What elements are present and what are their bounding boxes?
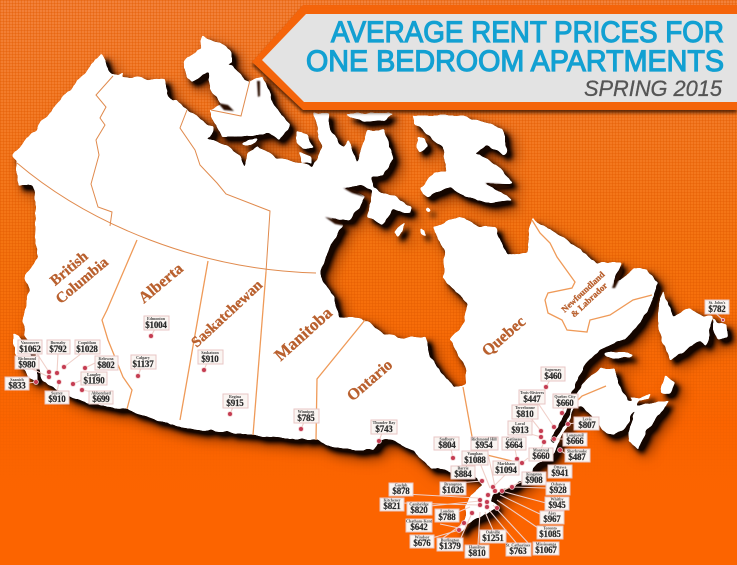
Saanich: Saanich [10, 377, 25, 382]
Montreal: $660 [532, 451, 550, 461]
Mississauga [533, 542, 559, 555]
Chatham-Kent: Chatham-Kent [406, 518, 433, 524]
Langley [81, 372, 107, 386]
Laval: Laval [515, 421, 526, 426]
Edmonton: Edmonton [147, 316, 166, 321]
Terrebonne: $810 [516, 409, 534, 419]
Longueuil: $666 [566, 436, 584, 446]
Montreal: Montreal [533, 448, 550, 452]
Richmond Hill: Richmond Hill [471, 436, 497, 442]
Langley: $1190 [83, 376, 105, 386]
Guelph: $878 [392, 486, 410, 496]
Kitchener: Kitchener [383, 498, 401, 502]
Saguenay [541, 367, 565, 381]
NWT / Nunavut [180, 110, 270, 272]
Nova Scotia [628, 400, 670, 450]
Richmond: $980 [18, 360, 36, 370]
Oakville: $1251 [482, 533, 504, 543]
Abbotsford: Abbotsford [91, 390, 112, 396]
Avalon peninsula [713, 317, 728, 338]
Barrie [451, 466, 475, 479]
Longueuil: Longueuil [566, 432, 585, 438]
Guelph: Guelph [395, 482, 408, 488]
60th parallel [17, 163, 316, 273]
St. Catharines: $763 [509, 546, 527, 556]
Vaughan: $1088 [464, 455, 486, 465]
St. Catharines: St. Catharines [506, 542, 531, 548]
location pins [34, 318, 725, 532]
Markham: $1094 [495, 465, 517, 475]
Southampton Island [368, 187, 412, 225]
Vancouver [18, 340, 42, 354]
Saskatoon: $910 [201, 354, 219, 364]
Brampton: Brampton [444, 482, 463, 486]
Surrey: Surrey [51, 390, 63, 396]
Windsor: Windsor [415, 534, 430, 540]
Ontario / Quebec [463, 387, 520, 463]
Regina: $915 [226, 398, 244, 408]
Langley: Langley [87, 372, 101, 377]
Ajax [540, 510, 564, 524]
Montreal [529, 448, 553, 461]
Winnipeg: $785 [297, 413, 315, 423]
Laval: $913 [511, 425, 529, 435]
Saanich: $833 [8, 380, 26, 390]
Quebec / Labrador [532, 220, 652, 332]
Saskatoon [198, 350, 223, 364]
Cambridge [407, 502, 432, 515]
Saguenay: Saguenay [545, 367, 561, 372]
Edmonton [144, 316, 169, 330]
price labels [5, 300, 729, 558]
Kingston: $908 [525, 475, 543, 485]
Manitoba / Ontario [316, 320, 365, 440]
Brampton: $1026 [442, 485, 464, 495]
St. John's [705, 300, 729, 314]
Windsor [410, 534, 434, 548]
banner shape [252, 5, 737, 110]
title banner [252, 5, 737, 110]
Quebec / New Brunswick [570, 386, 606, 408]
title line 2: ONE BEDROOM APARTMENTS [306, 45, 724, 78]
Saskatchewan: Saskatchewan [189, 277, 266, 351]
dark slits in the islands [218, 81, 624, 288]
Barrie: $884 [454, 469, 472, 479]
Whitby: Whitby [551, 496, 563, 502]
Burnaby: Burnaby [50, 340, 66, 345]
Hudson Bay islands [393, 222, 405, 236]
London [435, 508, 459, 522]
Chatham-Kent: $642 [410, 522, 428, 532]
Abbotsford: $699 [92, 394, 110, 404]
Trois-Rivieres: Trois-Rivieres [520, 390, 544, 395]
Prince Edward Island [628, 392, 650, 403]
British Columbia: British [47, 248, 92, 289]
background [0, 0, 737, 430]
Ottawa: Ottawa [554, 464, 566, 470]
Vaughan: Vaughan [467, 451, 483, 456]
Surrey [45, 390, 69, 404]
Cambridge: $820 [410, 505, 428, 515]
British Columbia: Columbia [53, 254, 112, 307]
Oshawa: Oshawa [551, 482, 565, 486]
Oshawa: $928 [549, 485, 567, 495]
Calgary: $1137 [132, 359, 154, 369]
Toronto: Toronto [543, 526, 557, 530]
Thunder Bay: $743 [375, 424, 393, 434]
Trois-Rivieres: $447 [523, 394, 541, 404]
Banks Island [183, 37, 232, 82]
Ottawa [548, 464, 572, 478]
Barrie: Barrie [457, 466, 469, 470]
province name labels [47, 248, 609, 405]
Richmond [15, 356, 39, 370]
Gatineau: $664 [505, 440, 523, 450]
Saanich [5, 377, 29, 390]
Toronto: $1085 [539, 529, 561, 539]
Ontario: Ontario [344, 356, 396, 405]
Abbotsford [89, 390, 113, 404]
Quebec City [553, 394, 578, 408]
Cambridge: Cambridge [409, 502, 429, 506]
Terrebonne [512, 405, 538, 419]
Coquitlam: Coquitlam [78, 340, 97, 345]
Surrey: $910 [48, 394, 66, 404]
Guelph [389, 482, 413, 496]
Cape Breton [660, 375, 675, 395]
Toronto [537, 526, 563, 539]
Calgary: Calgary [136, 355, 150, 360]
St. Catharines [506, 542, 531, 556]
Vaughan [462, 451, 488, 465]
Coquitlam [75, 340, 100, 354]
Saskatchewan / Manitoba [253, 272, 266, 435]
Levis: $807 [578, 420, 596, 430]
Saguenay: $460 [544, 371, 562, 381]
Ajax: Ajax [548, 510, 556, 516]
Baffin Island [413, 115, 513, 203]
Mississauga: $1067 [535, 545, 557, 555]
Levis: Levis [582, 416, 592, 422]
Oshawa [546, 482, 570, 495]
London: $788 [438, 512, 456, 522]
Vancouver: Vancouver [21, 340, 39, 345]
mainland [12, 54, 658, 532]
Edmonton: $1004 [145, 320, 167, 330]
Windsor: $676 [413, 538, 431, 548]
leader lines [28, 310, 723, 545]
London: London [440, 508, 454, 514]
Longueuil [563, 432, 587, 446]
Sherbrooke [565, 448, 590, 462]
Ajax: $967 [543, 514, 561, 524]
Yukon / NWT [91, 76, 113, 226]
BC / Alberta [102, 240, 137, 409]
Regina: Regina [229, 394, 241, 399]
Laval [508, 421, 532, 435]
Kelowna: Kelowna [98, 356, 114, 361]
Regina [223, 394, 248, 408]
Sudbury: Sudbury [440, 436, 454, 442]
provincial borders [17, 76, 316, 273]
Burlington [437, 538, 463, 551]
Thunder Bay [371, 420, 397, 434]
Calgary [131, 355, 156, 369]
Vancouver: $1062 [19, 344, 41, 354]
Chatham-Kent [406, 518, 433, 532]
Richmond: Richmond [18, 356, 37, 361]
Whitby: $945 [548, 500, 566, 510]
Thunder Bay: Thunder Bay [373, 420, 395, 425]
Manitoba: Manitoba [271, 303, 336, 365]
Whitby [545, 496, 569, 510]
Hamilton: $810 [468, 548, 486, 558]
Kingston [522, 472, 546, 485]
Newfoundland and Labrador: & Labrador [569, 280, 609, 319]
subtitle: SPRING 2015 [584, 76, 723, 101]
Vancouver Island [13, 333, 37, 382]
Hamilton: Hamilton [469, 544, 486, 550]
Sudbury [434, 436, 459, 450]
Sherbrooke: Sherbrooke [567, 448, 587, 454]
Alberta / Saskatchewan [180, 261, 208, 420]
Victoria Island [208, 65, 290, 140]
Levis [574, 416, 599, 430]
Newfoundland and Labrador: Newfoundland [559, 269, 607, 314]
Saskatoon: Saskatoon [201, 350, 220, 355]
Sherbrooke: $487 [568, 452, 586, 462]
Kingston: Kingston [526, 472, 543, 476]
Oakville: Oakville [486, 530, 500, 534]
Gatineau: Gatineau [506, 436, 523, 442]
Ottawa: $941 [551, 468, 569, 478]
Quebec City: $660 [556, 398, 574, 408]
Victoria Island line [211, 80, 250, 116]
Kitchener [380, 498, 404, 511]
Richmond Hill: $954 [475, 440, 493, 450]
St. John's: St. John's [709, 300, 726, 305]
Markham [493, 461, 519, 475]
Newfoundland [658, 290, 713, 360]
Winnipeg: Winnipeg [298, 409, 314, 414]
St. John's: $782 [708, 304, 726, 314]
Alberta: Alberta [136, 260, 187, 307]
Mississauga: Mississauga [536, 542, 556, 546]
Burnaby: $792 [49, 344, 67, 354]
Markham: Markham [497, 461, 515, 466]
Quebec: Quebec [479, 313, 529, 360]
Gatineau [502, 436, 526, 450]
Burlington: $1379 [439, 541, 461, 551]
Burnaby [47, 340, 70, 354]
Kelowna [95, 356, 118, 370]
Sudbury: $804 [438, 440, 456, 450]
Arctic islands near the banner [347, 113, 395, 122]
Oakville [480, 530, 506, 543]
Anticosti Island [605, 352, 633, 358]
Kelowna: $802 [97, 360, 115, 370]
Trois-Rivieres [519, 390, 545, 404]
Quebec City: Quebec City [554, 394, 576, 399]
Burlington: Burlington [441, 538, 460, 542]
Terrebonne: Terrebonne [515, 405, 535, 410]
Kitchener: $821 [383, 501, 401, 511]
Richmond Hill [471, 436, 498, 450]
Winnipeg [294, 409, 319, 423]
Hamilton [465, 544, 489, 558]
Brampton [440, 482, 466, 495]
Coquitlam: $1028 [76, 344, 98, 354]
